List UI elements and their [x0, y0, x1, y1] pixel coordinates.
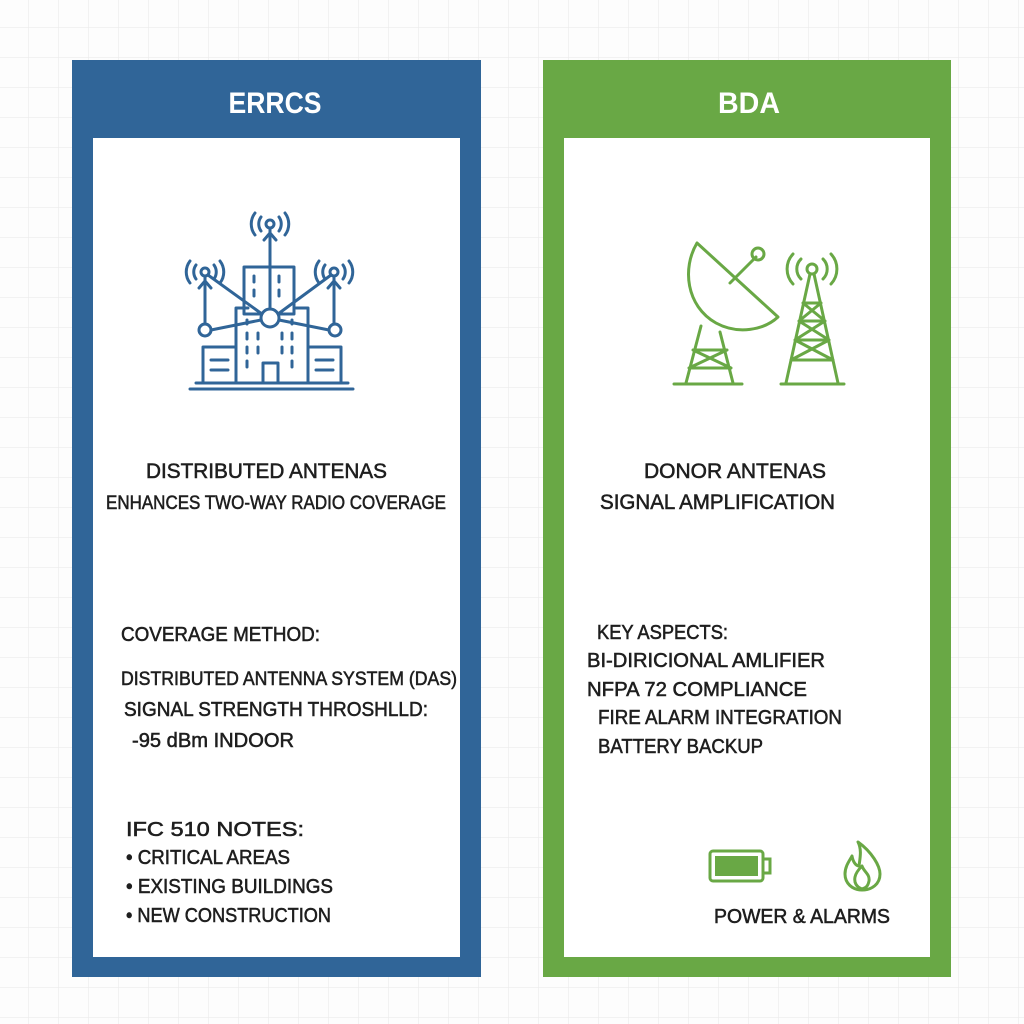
text: key aspects: BI-DIRICIONAL AMLIFIER — [587, 650, 825, 672]
panel: BDA — [543, 60, 951, 977]
text: coverage method: SIGNAL STRENGTH THROSHLLD: — [124, 699, 428, 721]
panel: ERRCS — [72, 60, 481, 977]
text: key aspects: NFPA 72 COMPLIANCE — [587, 679, 807, 701]
text: distributed antenas: ENHANCES TWO-WAY RADIO COVERAGE — [106, 493, 446, 514]
text: IFC 510 notes: • NEW CONSTRUCTION — [126, 905, 331, 927]
text: IFC 510 notes: • CRITICAL AREAS — [126, 847, 290, 869]
text: key aspects: KEY ASPECTS: — [597, 622, 728, 644]
text: key aspects: BATTERY BACKUP — [598, 736, 763, 758]
text: IFC 510 notes — [126, 819, 333, 927]
icon: battery — [710, 851, 770, 881]
text: key aspects: FIRE ALARM INTEGRATION — [598, 707, 842, 729]
text: power & alarms: POWER & ALARMS — [714, 906, 890, 928]
text: distributed antenas: DISTRIBUTED ANTENAS — [146, 460, 387, 483]
icon: satellite dish and tower — [674, 243, 844, 384]
text: key aspects — [587, 622, 842, 758]
icon: building with distributed antennas — [186, 213, 353, 389]
icon: flame — [845, 842, 880, 890]
text: coverage method: COVERAGE METHOD: — [121, 624, 320, 646]
text: distributed antenas — [106, 460, 446, 514]
text: coverage method: DISTRIBUTED ANTENNA SYSTEM (DAS) — [121, 669, 457, 690]
text: coverage method — [121, 624, 457, 752]
text: coverage method: -95 dBm INDOOR — [132, 730, 294, 752]
heading: BDA: BDA — [718, 87, 780, 120]
text: IFC 510 notes: • EXISTING BUILDINGS — [126, 876, 333, 898]
heading: ERRCS: ERRCS — [228, 87, 322, 120]
text: IFC 510 notes: IFC 510 NOTES: — [126, 819, 304, 841]
text: donor antenas — [600, 460, 835, 514]
text: donor antenas: DONOR ANTENAS — [644, 460, 826, 483]
text: donor antenas: SIGNAL AMPLIFICATION — [600, 491, 835, 514]
